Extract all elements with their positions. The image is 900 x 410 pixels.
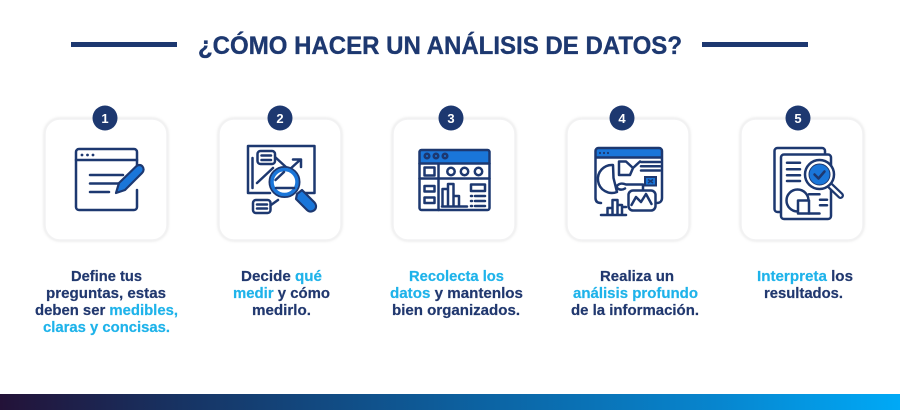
step 3 [390, 106, 523, 319]
number badge 5: 5 [794, 111, 802, 126]
description 1: claras y concisas. [43, 320, 170, 336]
description 2: medir y cómo [233, 286, 330, 302]
title [71, 30, 808, 60]
number badge 4 [610, 106, 634, 130]
icon: analytics monitor [595, 148, 662, 215]
description 3: Recolecta los [409, 269, 504, 285]
description 4: análisis profundo [573, 286, 698, 302]
step 4 [567, 106, 699, 319]
step 1 [35, 106, 178, 336]
number badge 3: 3 [447, 111, 455, 126]
description 1 [35, 269, 178, 336]
card 4 [567, 119, 689, 240]
number badge 4: 4 [618, 111, 626, 126]
icon: data dashboard window [419, 149, 490, 210]
description 2 [233, 269, 330, 319]
number badge 5 [786, 106, 810, 130]
description 1: Define tus [71, 269, 142, 285]
description 2: medirlo. [252, 303, 311, 319]
card 3 [393, 119, 515, 240]
title: ¿CÓMO HACER UN ANÁLISIS DE DATOS? [198, 30, 682, 60]
description 4: Realiza un [600, 269, 674, 285]
description 4: de la información. [571, 303, 699, 319]
description 3: bien organizados. [392, 303, 520, 319]
number badge 2 [268, 106, 292, 130]
icon: magnifier over chart [248, 146, 316, 213]
number badge 3 [438, 106, 464, 130]
step 2 [219, 106, 341, 319]
number badge 1 [92, 106, 118, 130]
number badge 2: 2 [276, 111, 284, 126]
description 1: deben ser medibles, [35, 303, 178, 319]
description 2: Decide qué [241, 269, 322, 285]
description 5: Interpreta los [757, 269, 853, 285]
description 3 [390, 269, 523, 319]
icon: window with pencil [76, 149, 144, 210]
footer gradient bar [0, 394, 900, 410]
description 5: resultados. [764, 286, 843, 302]
step 5 [741, 106, 863, 302]
description 4 [571, 269, 699, 319]
icon: report with magnifier [774, 148, 840, 219]
card 2 [219, 119, 341, 240]
card 1 [45, 119, 167, 240]
card 5 [741, 119, 863, 240]
description 3: datos y mantenlos [390, 286, 523, 302]
description 1: preguntas, estas [46, 286, 166, 302]
description 5 [757, 269, 853, 302]
number badge 1: 1 [101, 111, 109, 126]
